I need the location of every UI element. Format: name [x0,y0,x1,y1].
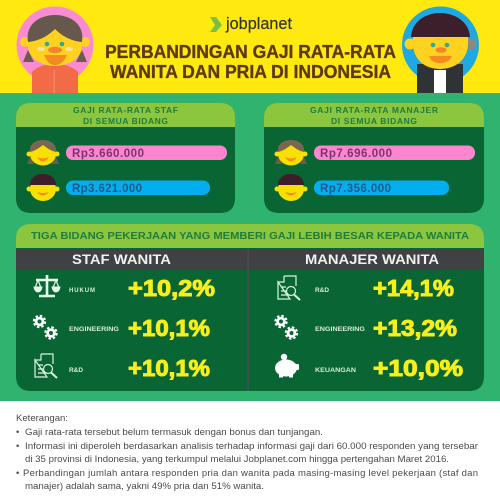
icon: piggy bank [275,354,299,378]
heading: staff salary: GAJI RATA-RATA STAF [73,105,178,115]
heading: staf wanita: STAF WANITA [72,251,171,267]
icon: woman face [274,140,308,166]
value: hukum: +10,2% [128,275,215,301]
icon: man avatar [402,6,479,93]
text block: notes: Keterangan: [16,413,68,424]
icon: man face [274,174,308,201]
label: keuangan: KEUANGAN [315,368,356,374]
panel: manager salary [264,103,484,213]
bar: men manager salary [314,180,449,195]
heading: manager salary [310,105,438,126]
bar: women staff salary [66,146,227,160]
panel: staff salary [16,103,235,213]
icon: document search [35,354,57,378]
heading: top three fields: TIGA BIDANG PEKERJAAN YANG MEMBERI GAJI LEBIH BESAR KEPADA WANITA [31,231,469,242]
text block: notes: • [16,441,19,452]
heading: staff salary [73,105,178,126]
bar: men staff salary: Rp3.621.000 [72,183,142,195]
text block: notes: • [16,427,19,438]
text block: notes: manajer) adalah sama, yakni 49% pria dan 51% wanita. [25,481,264,492]
bar: men manager salary: Rp7.356.000 [320,183,391,195]
text block: notes [16,413,478,492]
bar: men staff salary [66,180,210,195]
heading: manager salary: DI SEMUA BIDANG [331,116,417,126]
text block: notes: Informasi ini diperoleh berdasarkan analisis terhadap informasi gaji dari 60.000 responden yang tersebar [25,441,478,452]
main green background [0,93,500,401]
icon: scales [34,275,60,296]
text block: notes: Perbandingan jumlah antara responden pria dan wanita pada masing-masing level pekerjaan (staf dan [23,468,478,479]
heading: manager salary: GAJI RATA-RATA MANAJER [310,105,438,115]
title: WANITA DAN PRIA DI INDONESIA [110,62,391,82]
heading: manajer wanita: MANAJER WANITA [305,251,439,267]
icon: man face [26,174,60,201]
icon: gears [34,316,57,339]
value: r&d: +14,1% [373,275,454,301]
value: r&d: +10,1% [128,355,210,381]
label: engineering: ENGINEERING [315,327,365,333]
bar: women manager salary [314,146,475,160]
label: engineering: ENGINEERING [69,327,119,333]
text block: notes: di 35 provinsi di Indonesia, yang terkumpul melalui Jobplanet.com hingga pertengahan Maret 2016. [25,454,449,465]
value: keuangan: +10,0% [373,355,463,381]
value: engineering: +10,1% [128,315,210,341]
bar: women staff salary: Rp3.660.000 [72,148,144,160]
icon: gears [275,316,297,339]
label: r&d: R&D [69,368,84,374]
panel: top three fields [16,224,484,391]
text block: notes: Gaji rata-rata tersebut belum termasuk dengan bonus dan tunjangan. [25,427,323,438]
label: hukum: HUKUM [69,288,95,294]
title [105,42,396,82]
icon: woman face [26,140,60,166]
logo: jobplanet: jobplanet [225,14,292,33]
text block: notes: • [16,468,19,479]
heading: staff salary: DI SEMUA BIDANG [83,116,168,126]
value: engineering: +13,2% [373,315,457,341]
header background [0,0,500,93]
bar: women manager salary: Rp7.696.000 [320,148,392,160]
icon: woman avatar [16,6,94,93]
label: r&d: R&D [315,288,330,294]
icon: document search [278,276,300,300]
title: PERBANDINGAN GAJI RATA-RATA [105,42,396,62]
